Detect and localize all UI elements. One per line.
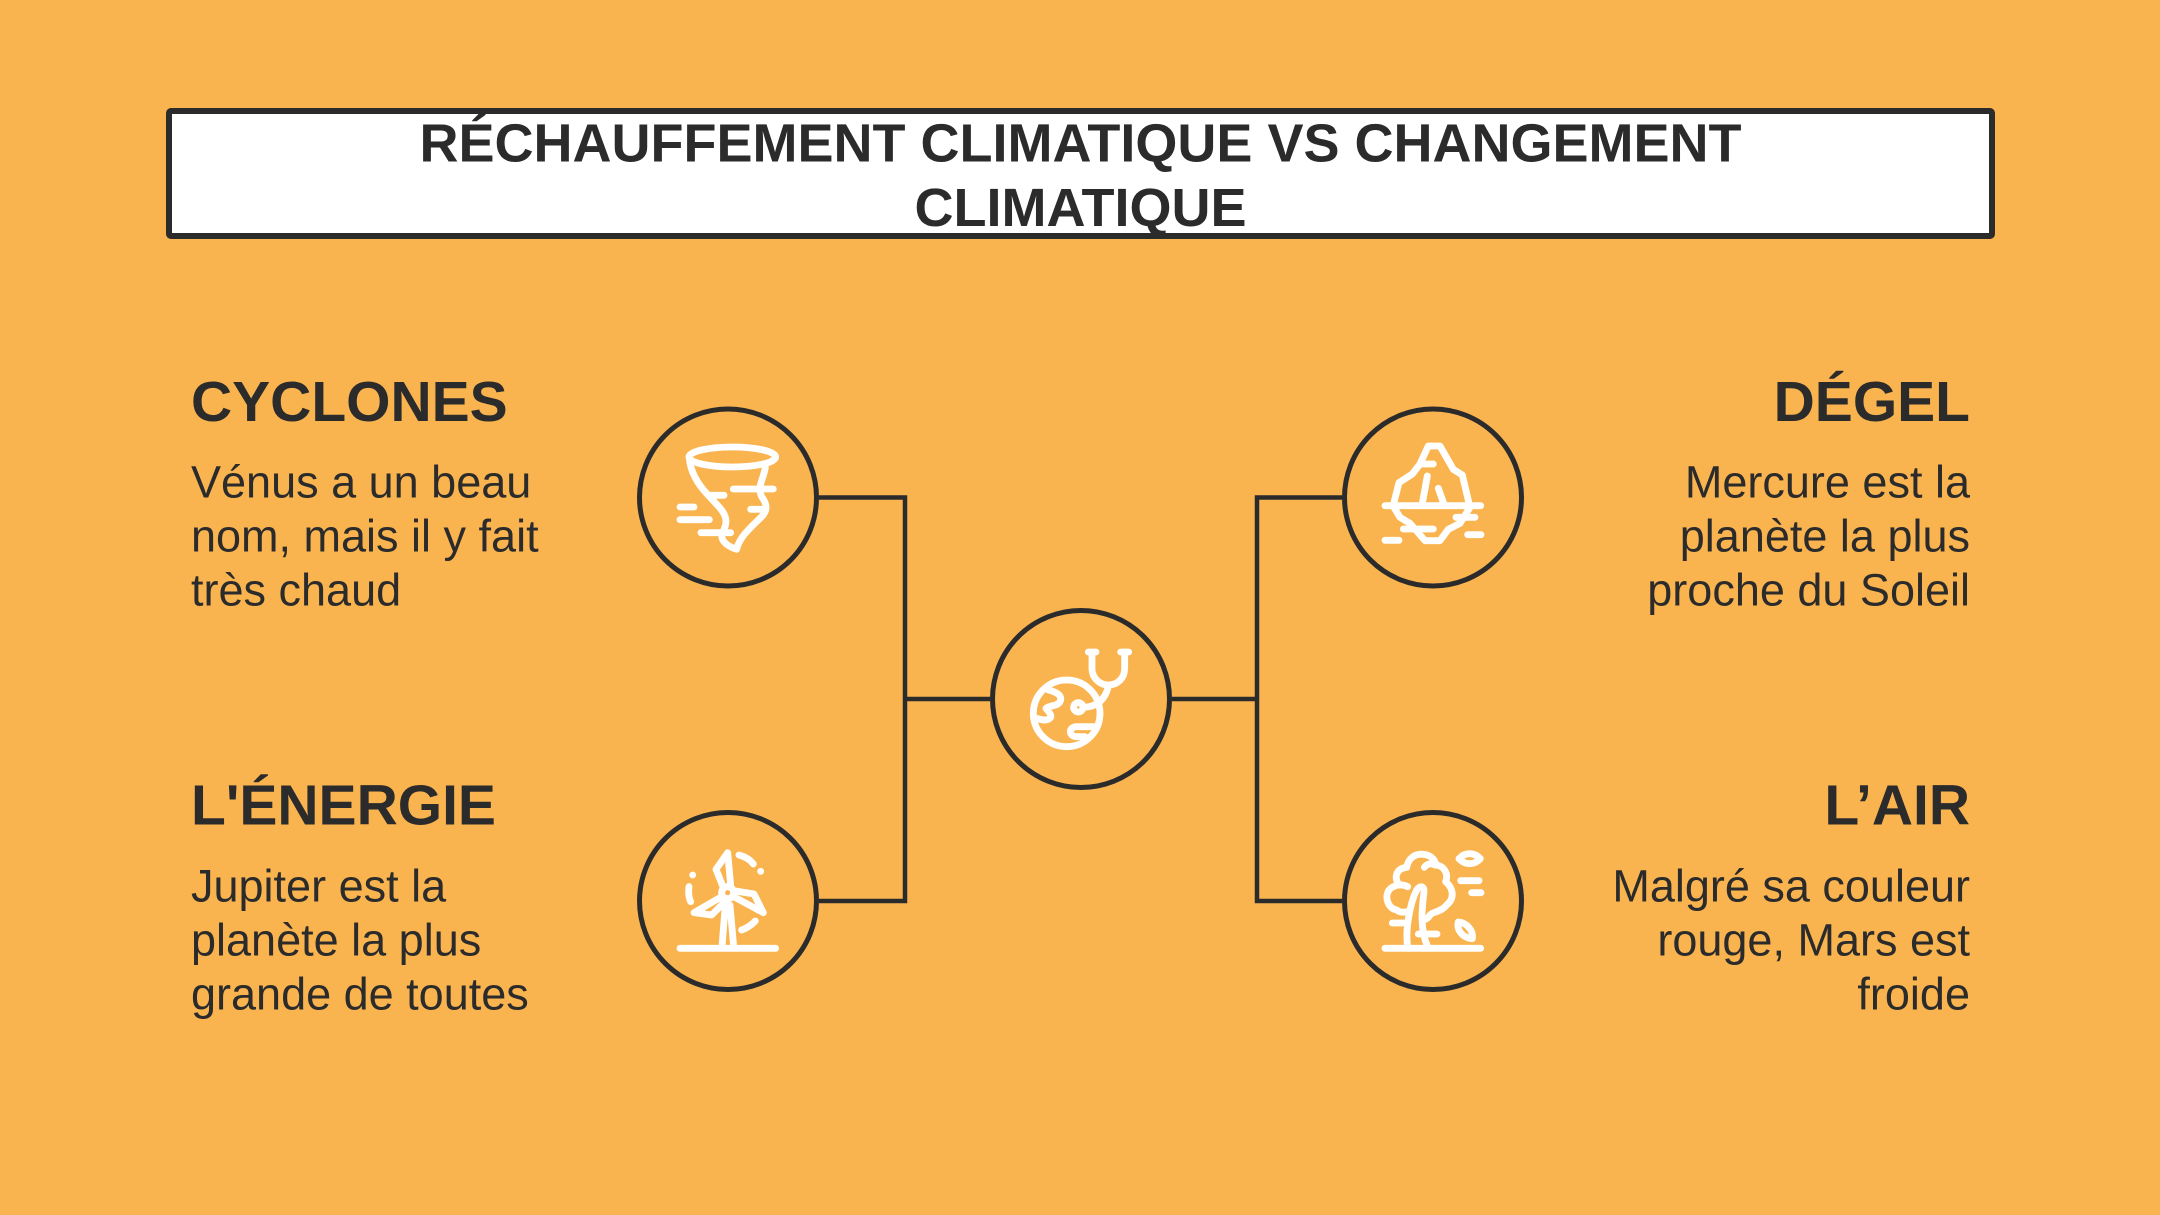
text: energie description: grande de toutes — [191, 968, 529, 1020]
text: air description: rouge, Mars est — [1657, 914, 1970, 966]
title text: RÉCHAUFFEMENT CLIMATIQUE VS CHANGEMENT — [420, 114, 1741, 174]
title box — [169, 111, 1992, 238]
heading: energie: L'ÉNERGIE — [191, 774, 496, 838]
heading: air: L’AIR — [1824, 774, 1970, 838]
text: cyclones description: nom, mais il y fait — [191, 510, 539, 562]
text: degel description: Mercure est la — [1685, 456, 1971, 508]
text: air description: Malgré sa couleur — [1612, 860, 1970, 912]
connector lines — [819, 498, 1342, 901]
icon: planet with stethoscope — [992, 610, 1170, 788]
text: energie description: planète la plus — [191, 914, 481, 966]
title text: CLIMATIQUE — [915, 178, 1246, 238]
text: degel description — [1647, 456, 1971, 616]
icon: tornado — [640, 409, 816, 586]
heading: cyclones: CYCLONES — [191, 370, 508, 434]
text: degel description: planète la plus — [1680, 510, 1970, 562]
heading: degel: DÉGEL — [1774, 370, 1970, 434]
icon: wind turbine — [640, 812, 816, 990]
icon: iceberg — [1344, 409, 1522, 586]
icon: tree in wind — [1344, 812, 1522, 990]
text: air description: froide — [1857, 968, 1970, 1020]
text: air description — [1612, 860, 1970, 1020]
title text — [420, 114, 1741, 238]
panel: degel text — [1647, 370, 1971, 616]
panel: air text — [1612, 774, 1970, 1020]
text: energie description — [191, 860, 529, 1020]
panel: energie text — [191, 774, 529, 1020]
text: cyclones description: Vénus a un beau — [191, 456, 531, 508]
text: cyclones description — [191, 456, 539, 616]
text: energie description: Jupiter est la — [191, 860, 447, 912]
panel: cyclones text — [191, 370, 539, 616]
text: degel description: proche du Soleil — [1647, 564, 1970, 616]
text: cyclones description: très chaud — [191, 564, 401, 616]
